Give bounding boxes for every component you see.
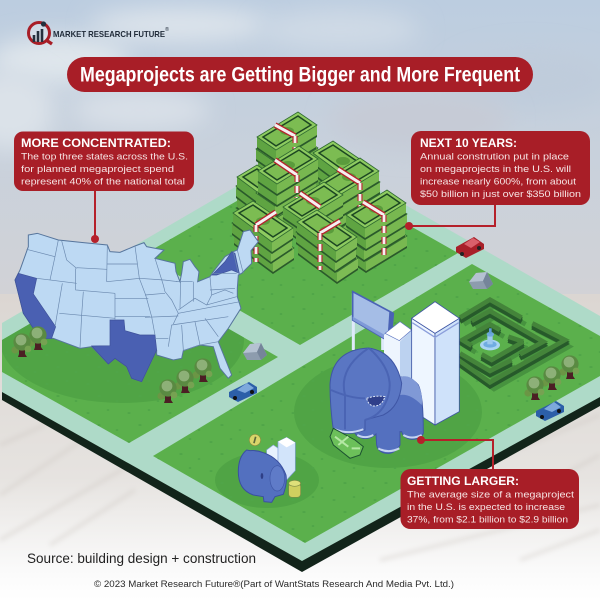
background: sky bbox=[0, 0, 600, 300]
callout: more concentrated: The top three states across the U.S. bbox=[21, 150, 188, 162]
callout: next 10 years: on megaprojects in the U.S. will bbox=[420, 163, 571, 174]
large elephant bbox=[330, 348, 423, 458]
callout: more concentrated: for planned megaproject spend bbox=[21, 163, 174, 174]
registered mark: ® bbox=[165, 26, 169, 33]
towers and billboard bbox=[353, 292, 459, 425]
callout: more concentrated bbox=[14, 132, 194, 191]
hedge maze with fountain bbox=[458, 300, 569, 389]
elephant body bbox=[355, 377, 423, 453]
callout: getting larger: GETTING LARGER: bbox=[407, 474, 519, 488]
connector: getting larger to elephant bbox=[417, 436, 493, 469]
haunch highlight bbox=[400, 376, 422, 405]
green plot: money and map bbox=[143, 164, 458, 345]
billboard bbox=[353, 292, 393, 350]
trees: left park bbox=[11, 326, 212, 403]
green plot: left park bbox=[2, 324, 278, 443]
callout: getting larger: The average size of a megaproject bbox=[407, 488, 574, 500]
callout: next 10 years: $50 billion in just over $350 billion bbox=[420, 188, 581, 199]
callout: more concentrated: MORE CONCENTRATED: bbox=[21, 137, 171, 150]
title banner bbox=[67, 57, 533, 92]
small tower bbox=[384, 322, 412, 380]
car: blue right bbox=[536, 401, 564, 421]
logo icon bbox=[28, 21, 52, 44]
elephant folds bbox=[331, 348, 390, 429]
US map bbox=[15, 230, 258, 382]
tall tower bbox=[412, 302, 459, 425]
elephant toes bbox=[335, 429, 422, 451]
small elephant with towers and coins bbox=[238, 434, 301, 502]
elephant eye bbox=[367, 396, 385, 406]
cash pile under elephant bbox=[330, 428, 363, 458]
state: Texas bbox=[92, 320, 157, 382]
car: red bbox=[456, 237, 484, 258]
elephant head and ear bbox=[330, 348, 402, 433]
fountain bbox=[480, 328, 500, 350]
title banner: Megaprojects are Getting Bigger and More Frequent bbox=[80, 64, 520, 86]
car: blue left bbox=[229, 382, 257, 402]
coin token bbox=[249, 434, 261, 446]
small elephant bbox=[238, 450, 286, 502]
state: New York bbox=[212, 252, 239, 275]
callout: getting larger bbox=[400, 469, 579, 529]
source note: Source: building design + construction bbox=[27, 551, 256, 566]
background: wooden floor bbox=[0, 294, 600, 600]
connector: next 10 years to money bbox=[405, 205, 495, 230]
callout: more concentrated: represent 40% of the national total bbox=[21, 176, 185, 186]
callout: getting larger: 37%, from $2.1 billion to $2.9 billion bbox=[407, 514, 568, 524]
copyright: © 2023 Market Research Future®(Part of WantStats Research And Media Pvt. Ltd.) bbox=[94, 579, 454, 589]
map outline bbox=[15, 230, 258, 382]
callout: next 10 years: increase nearly 600%, from about bbox=[420, 176, 576, 186]
isometric board bbox=[0, 147, 600, 572]
trees: right plot bbox=[524, 355, 579, 400]
callout: next 10 years: Annual constrution put in place bbox=[420, 150, 569, 162]
western state borders bbox=[27, 240, 155, 348]
small towers bbox=[267, 437, 295, 480]
logo bbox=[28, 21, 169, 44]
coin stack bbox=[289, 480, 301, 497]
money stacks bbox=[232, 112, 407, 284]
eastern state borders bbox=[139, 250, 243, 351]
green plot: elephant and maze bbox=[153, 264, 600, 543]
state: California bbox=[15, 273, 56, 338]
callout: next 10 years: NEXT 10 YEARS: bbox=[420, 136, 517, 150]
callout: next 10 years bbox=[411, 131, 590, 205]
logo wordmark: MARKET RESEARCH FUTURE bbox=[53, 29, 165, 39]
rocks bbox=[243, 272, 493, 360]
callout: getting larger: in the U.S. is expected to increase bbox=[407, 501, 565, 512]
connector: concentrated to map bbox=[91, 191, 99, 243]
